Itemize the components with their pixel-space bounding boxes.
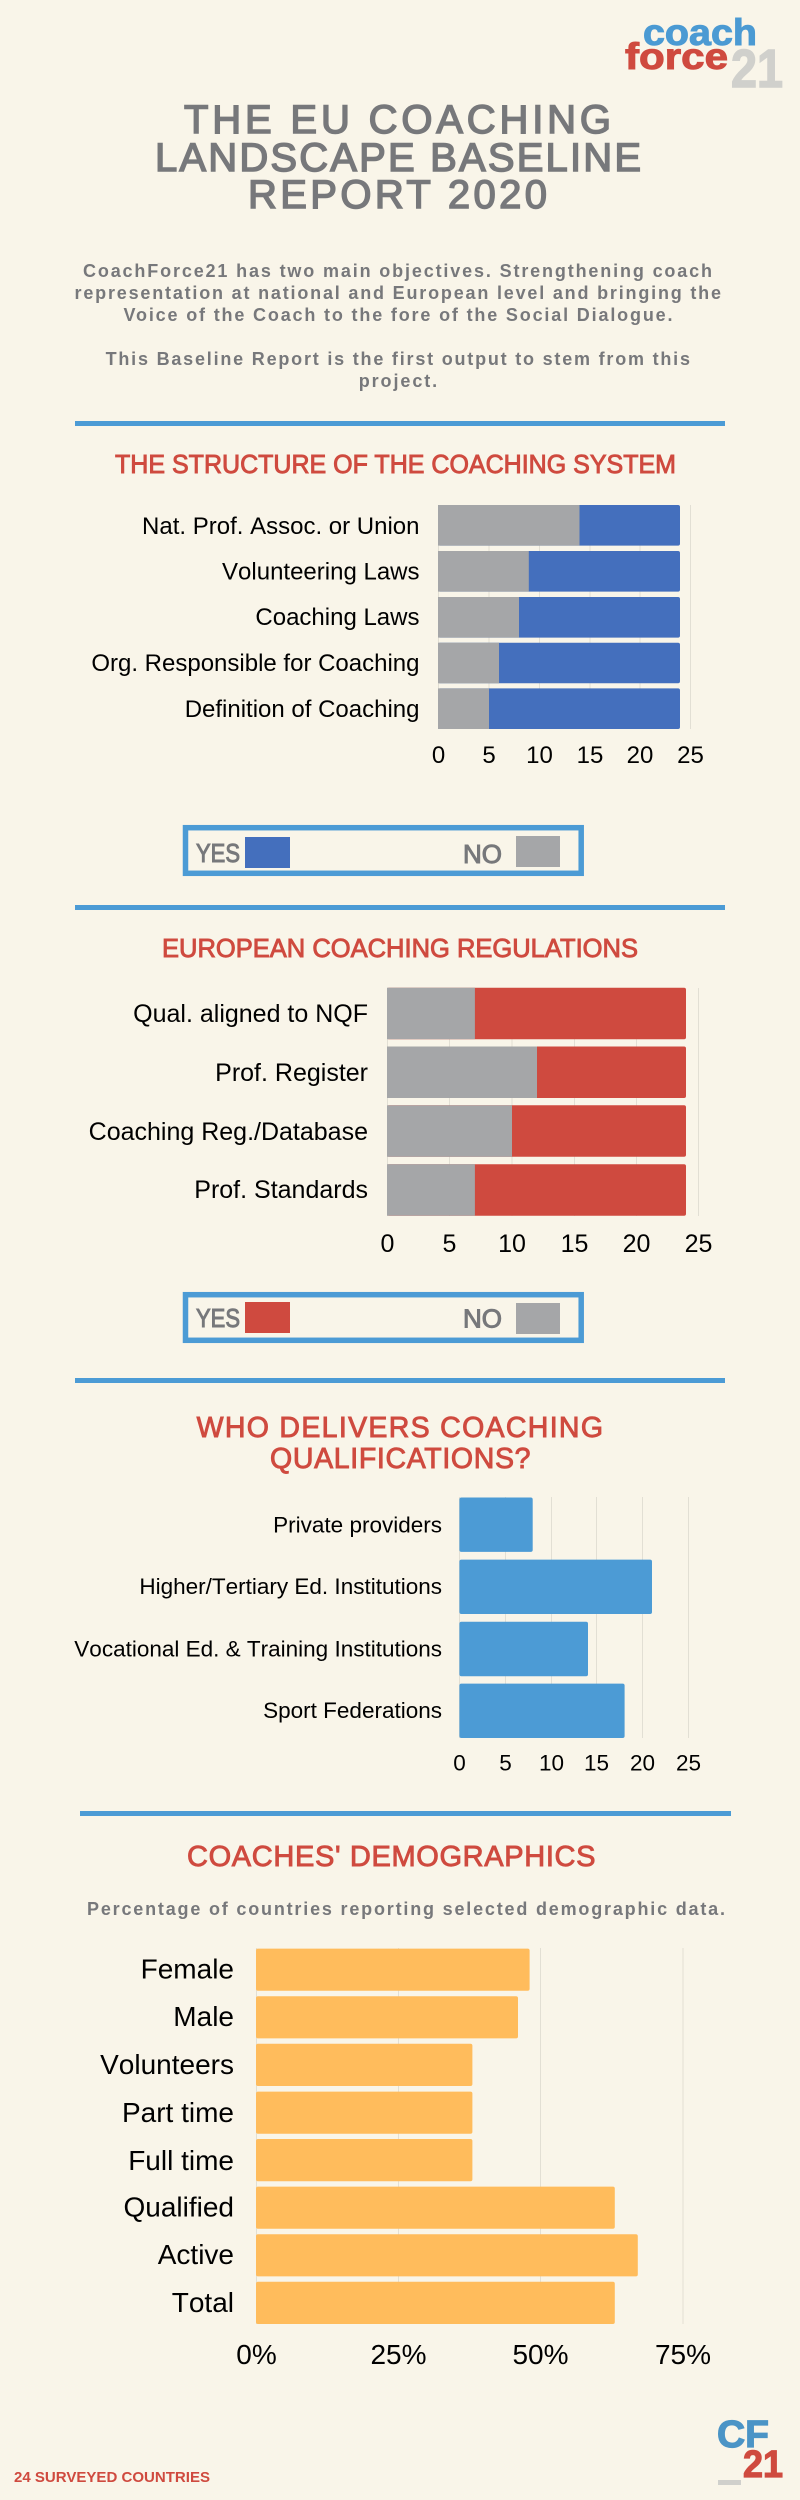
title: THE EU COACHING (184, 98, 611, 142)
bar chart: demographics: Qualified (123, 2192, 234, 2222)
bar chart: demographics: 25% (370, 2339, 427, 2370)
bar chart: providers (74, 1497, 701, 1776)
intro text: project. (359, 371, 437, 391)
stacked bar chart: regulations: 5 (443, 1230, 456, 1258)
legend: regulations: NO (463, 1304, 502, 1334)
stacked bar chart: structure: 5 (482, 742, 496, 769)
bar chart: providers: Sport Federations (263, 1698, 442, 1723)
stacked bar chart: structure: Nat. Prof. Assoc. or Union (142, 513, 420, 540)
legend: structure: NO (463, 839, 502, 869)
stacked bar chart: structure: 20 (627, 742, 653, 769)
bar chart: demographics: 50% (512, 2339, 569, 2370)
heading: demographics: COACHES' DEMOGRAPHICS (187, 1841, 596, 1873)
bar chart: demographics: Total (172, 2287, 234, 2318)
stacked bar chart: regulations: Prof. Register (215, 1059, 368, 1087)
heading: who delivers: QUALIFICATIONS? (270, 1443, 530, 1475)
panel: who delivers coaching qualifications (74, 1412, 701, 1776)
bar chart: providers: 10 (539, 1751, 564, 1776)
stacked bar chart: structure: 15 (577, 742, 603, 769)
stacked bar chart: structure: Volunteering Laws (222, 558, 420, 586)
legend: structure (186, 828, 581, 873)
legend: regulations (186, 1295, 581, 1340)
intro text: representation at national and European level and bringing the (74, 283, 721, 303)
stacked bar chart: regulations: 15 (561, 1230, 588, 1258)
intro text (74, 261, 721, 391)
bar chart: demographics: Part time (122, 2097, 234, 2128)
bar chart: demographics: Volunteers (100, 2049, 234, 2080)
bar chart: providers: Private providers (273, 1512, 442, 1538)
heading: who delivers: WHO DELIVERS COACHING (197, 1412, 603, 1444)
stacked bar chart: regulations: Prof. Standards (194, 1176, 368, 1204)
title: LANDSCAPE BASELINE (155, 136, 641, 180)
bar chart: demographics: Female (141, 1954, 234, 1984)
heading: who delivers (197, 1412, 603, 1475)
legend: regulations: YES (196, 1303, 240, 1333)
logo: CF21 (717, 2414, 783, 2486)
stacked bar chart: regulations: 0 (381, 1230, 394, 1258)
logo: CF21: 21 (743, 2444, 783, 2486)
bar chart: providers: 25 (676, 1751, 701, 1776)
bar chart: demographics: Male (173, 2001, 234, 2032)
logo: CF21: CF (717, 2414, 769, 2456)
intro text: Voice of the Coach to the fore of the Social Dialogue. (124, 305, 672, 325)
bar chart: providers: Vocational Ed. & Training Institutions (74, 1636, 442, 1661)
intro text: CoachForce21 has two main objectives. Strengthening coach (83, 261, 712, 281)
panel: coaches' demographics (87, 1841, 725, 2370)
stacked bar chart: structure: Definition of Coaching (185, 696, 420, 723)
stacked bar chart: structure: Coaching Laws (255, 604, 420, 631)
panel: european coaching regulations (89, 933, 712, 1340)
stacked bar chart: structure (91, 505, 704, 769)
bar chart: providers: 5 (499, 1751, 512, 1776)
panel: structure of the coaching system (91, 449, 704, 873)
stacked bar chart: regulations: 20 (623, 1230, 650, 1258)
stacked bar chart: regulations: Coaching Reg./Database (89, 1118, 368, 1146)
subheading: demographics: Percentage of countries reporting selected demographic data. (87, 1899, 725, 1919)
intro text: This Baseline Report is the first output to stem from this (106, 349, 690, 369)
logo: coachforce21: 21 (731, 39, 783, 99)
bar chart: demographics: Active (158, 2239, 234, 2270)
bar chart: providers: Higher/Tertiary Ed. Institutions (139, 1574, 442, 1599)
stacked bar chart: structure: 10 (526, 742, 553, 769)
logo: coachforce21: force (625, 36, 728, 77)
title (155, 98, 641, 217)
footnote: 24 SURVEYED COUNTRIES (14, 2469, 210, 2486)
bar chart: providers: 0 (453, 1751, 466, 1776)
legend: structure: YES (196, 838, 240, 868)
bar chart: providers: 20 (630, 1751, 655, 1776)
bar chart: demographics (100, 1948, 711, 2370)
heading: regulations: EUROPEAN COACHING REGULATIONS (162, 933, 638, 963)
stacked bar chart: regulations: 10 (498, 1230, 526, 1258)
logo: coachforce21 (625, 12, 783, 99)
bar chart: demographics: 75% (655, 2339, 711, 2370)
stacked bar chart: regulations (89, 988, 712, 1258)
stacked bar chart: structure: Org. Responsible for Coaching (91, 650, 420, 677)
title: REPORT 2020 (248, 173, 547, 217)
bar chart: demographics: Full time (128, 2145, 234, 2176)
stacked bar chart: structure: 0 (432, 742, 445, 769)
stacked bar chart: regulations: Qual. aligned to NQF (133, 1000, 368, 1028)
bar chart: providers: 15 (584, 1751, 609, 1776)
bar chart: demographics: 0% (236, 2339, 277, 2370)
stacked bar chart: structure: 25 (677, 742, 704, 769)
stacked bar chart: regulations: 25 (685, 1230, 712, 1258)
heading: structure: THE STRUCTURE OF THE COACHING SYSTEM (115, 449, 676, 479)
logo: coachforce21: coach (643, 12, 757, 53)
